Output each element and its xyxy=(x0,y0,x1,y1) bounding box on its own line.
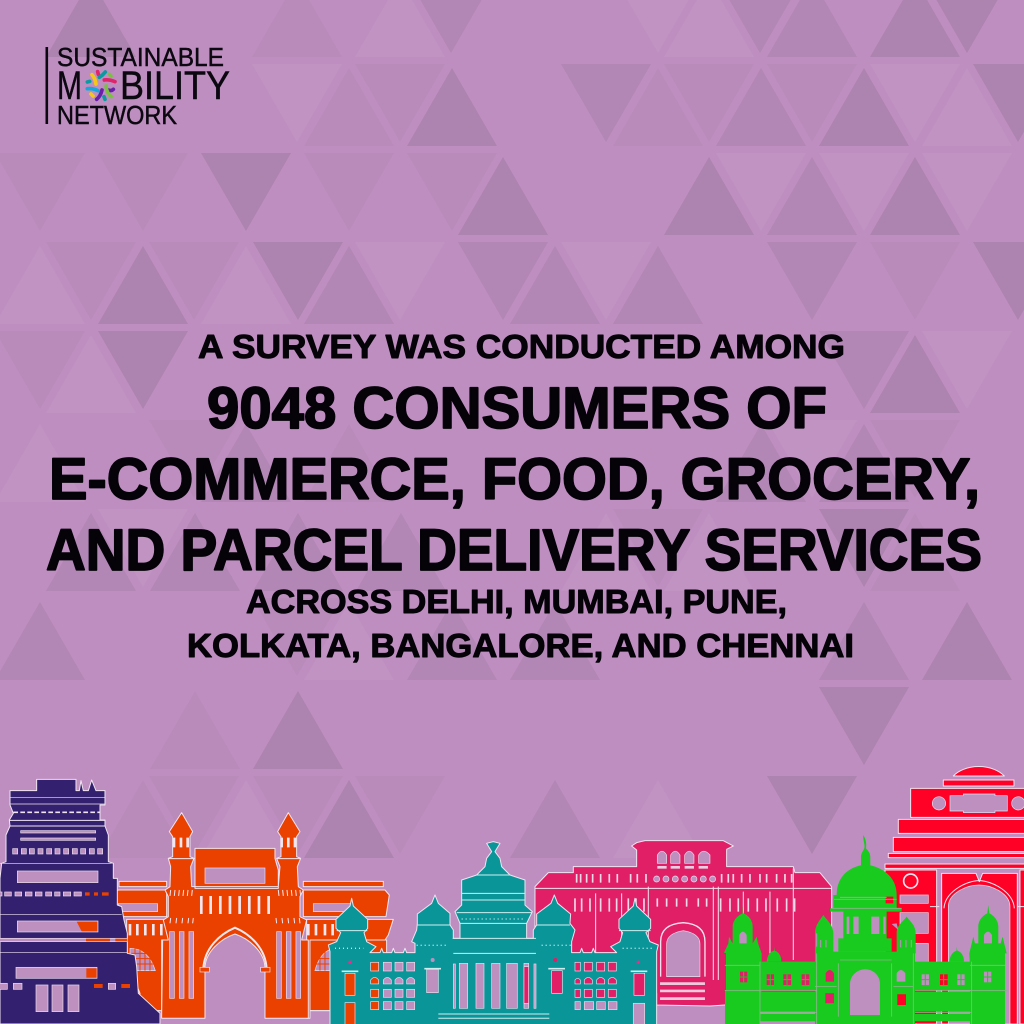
heading: main statement xyxy=(46,376,982,583)
heading: survey intro line: A SURVEY WAS CONDUCTED AMONG xyxy=(198,328,845,365)
landmark: Delhi India Gate (red) xyxy=(885,767,1024,1024)
landmark: Kolkata Victoria Memorial (green) xyxy=(724,835,1007,1024)
landmark: Chennai temple gopuram (purple) xyxy=(0,779,160,1024)
text: cities xyxy=(187,583,854,664)
landmark: Pune Shaniwar Wada (pink) xyxy=(535,841,832,1006)
heading: main statement: E-COMMERCE, FOOD, GROCERY, xyxy=(49,447,980,512)
text: cities: ACROSS DELHI, MUMBAI, PUNE, xyxy=(246,583,787,620)
logo: Sustainable Mobility Network: M xyxy=(57,64,82,108)
skyline: city landmarks xyxy=(0,767,1024,1024)
text: cities: KOLKATA, BANGALORE, AND CHENNAI xyxy=(187,627,854,664)
logo: Sustainable Mobility Network: BILITY xyxy=(120,64,230,108)
landmark: Mumbai Gateway of India (orange) xyxy=(113,813,393,1018)
heading: main statement: AND PARCEL DELIVERY SERVICES xyxy=(46,518,982,583)
icon: colourful logo wheel xyxy=(87,72,115,99)
heading: main statement: 9048 CONSUMERS OF xyxy=(207,376,827,441)
logo: Sustainable Mobility Network xyxy=(46,42,230,130)
logo: Sustainable Mobility Network: SUSTAINABLE xyxy=(57,42,224,72)
landmark: Bangalore Vidhana Soudha (teal) xyxy=(328,842,658,1024)
logo: Sustainable Mobility Network: NETWORK xyxy=(57,100,178,130)
